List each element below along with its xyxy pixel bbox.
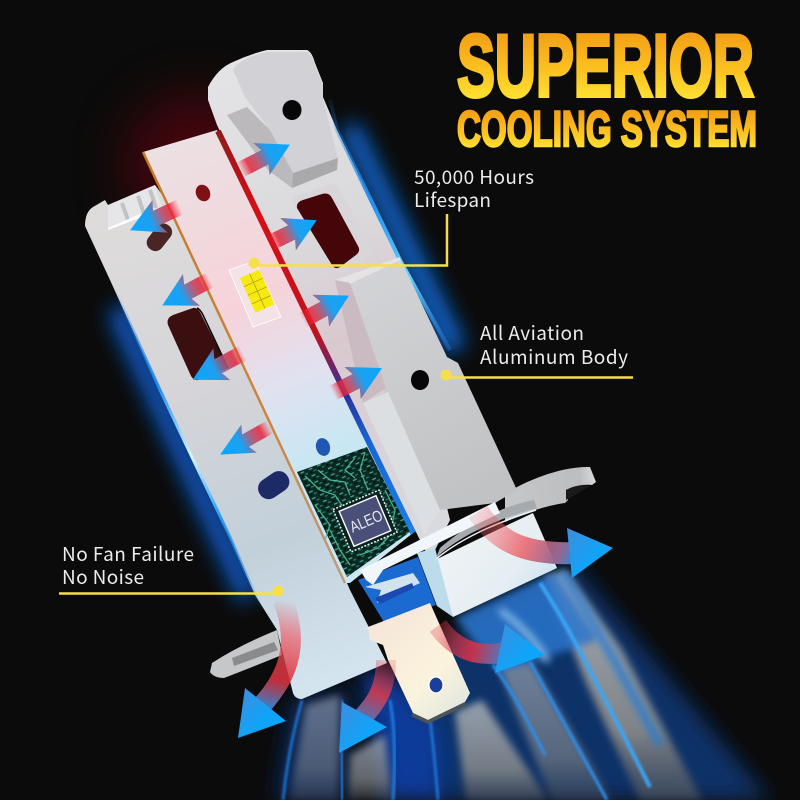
orange board edge [143, 152, 345, 583]
callout: no fan [59, 540, 284, 596]
upper window [293, 184, 373, 272]
top notch ridges [108, 185, 162, 230]
red to blue heated edge [218, 131, 413, 533]
LED chip base [229, 261, 281, 327]
callout: aluminum body [440, 319, 633, 380]
slot white piece [365, 573, 420, 603]
blue edge glow [108, 122, 466, 604]
LED chips [240, 269, 275, 313]
circuit board panel [143, 130, 413, 583]
curved arrow: bottom left [238, 600, 291, 738]
plate column [417, 548, 453, 617]
callout: lifespan [248, 163, 534, 268]
callout: aluminum body: Aluminum Body [480, 343, 628, 370]
arrow: left 3 [184, 337, 251, 396]
arrow: upper right 3 [295, 280, 357, 336]
back aluminum body [208, 50, 450, 560]
callout: lifespan: Lifespan [414, 186, 491, 213]
hole: terminal [429, 677, 443, 693]
callout: no fan: No Noise [62, 563, 144, 590]
arrow: upper right 2 [262, 204, 325, 259]
translucent plate [435, 513, 557, 617]
hole: block [411, 370, 429, 390]
left aluminum plate [85, 185, 387, 699]
exhaust light streams [276, 565, 770, 800]
block upper side [335, 280, 386, 403]
left window [168, 308, 228, 380]
upper cutout [227, 107, 293, 188]
arrow: upper right 4 [325, 352, 390, 409]
upper block front [292, 158, 338, 188]
callout: aluminum body: All Aviation [480, 319, 584, 346]
red heat glow [125, 93, 265, 237]
hole: top [282, 100, 302, 120]
block top ledge [335, 257, 400, 284]
arrow: left 2 [154, 264, 218, 321]
plate ridge [436, 500, 537, 558]
blue plate rims [115, 100, 450, 610]
blue slot section [358, 557, 436, 622]
raised upper face [233, 52, 338, 173]
callout: lifespan: 50,000 Hours [414, 163, 534, 190]
arrow: left 1 [123, 191, 188, 247]
hole: board blue [314, 436, 332, 458]
bottom left mounting clip [210, 630, 282, 678]
logo text: ALEO [348, 508, 385, 536]
callout: no fan: No Fan Failure [62, 540, 194, 567]
lower tray and plate [358, 500, 557, 622]
curved arrow: bottom center [339, 660, 387, 753]
white bar [360, 502, 500, 585]
hole: board red [193, 182, 213, 204]
left rivet [143, 220, 175, 254]
title [457, 16, 757, 157]
arrow: left 4 [212, 413, 278, 469]
spade terminal [368, 603, 470, 724]
curved arrow: bottom right [438, 624, 545, 673]
curved arrow: side right [478, 512, 613, 578]
bottom right mounting clip [505, 467, 596, 522]
green control circuit [297, 447, 410, 577]
lower rivet [254, 467, 293, 503]
arrow: upper right 1 [232, 129, 298, 186]
front aluminum block [335, 257, 517, 535]
block lower side [363, 392, 440, 535]
